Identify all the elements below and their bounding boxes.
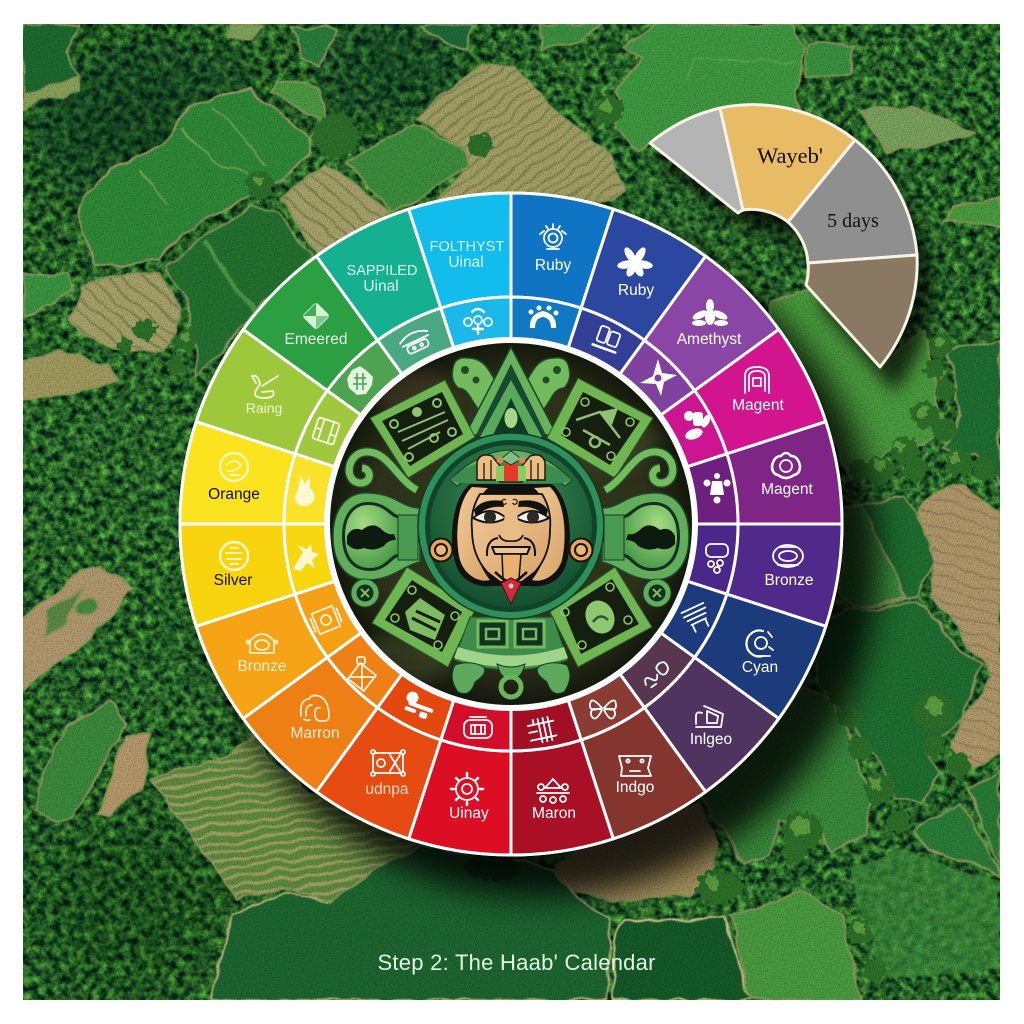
segment label: Maron: Maron (532, 805, 576, 822)
segment label: Amethyst: Amethyst (677, 331, 742, 348)
segment label: Cyan (742, 630, 778, 676)
segment label: Bronze 1: Bronze (764, 572, 814, 589)
brows (474, 500, 504, 517)
bottom ornament (452, 617, 570, 697)
nose and mouth (499, 507, 523, 541)
segment label: Ruby 2: Ruby (618, 282, 654, 299)
segment label: Amethyst (677, 299, 742, 348)
wedge backgrounds: 20 outer and 20 inner cells (165, 178, 857, 870)
segment label: Folthyst Uinal: Uinal (448, 254, 484, 271)
glyph (684, 411, 712, 442)
glyph (347, 366, 373, 395)
segment label: Sapphire Uinal (347, 263, 417, 295)
segment label: Bronze 1 (764, 545, 814, 589)
glyph (640, 359, 677, 396)
segment label: Inlgeo (690, 706, 732, 748)
top triangle (465, 347, 557, 437)
segment label: Emeered (285, 302, 347, 348)
fan segment: brown (806, 255, 917, 367)
segment label: Uinay: Uinay (449, 805, 489, 822)
segment label: Folthyst Uinal: FOLTHYST (430, 239, 504, 255)
segment label: Raing: Raing (246, 400, 282, 416)
glyph (464, 717, 492, 738)
segment label: Emeered: Emeered (285, 331, 347, 348)
fan segment: 5 days (788, 140, 917, 263)
segment label: Raing (246, 376, 282, 416)
segment label: Orange (208, 453, 260, 503)
glyph (590, 700, 616, 719)
segment label: Inlgeo: Inlgeo (690, 731, 732, 748)
segment label: Magent 2: Magent (761, 481, 814, 498)
ear rings (430, 538, 592, 562)
fan segment: Wayeb: Wayeb' (757, 143, 823, 168)
segment label: Indgo: Indgo (616, 779, 654, 796)
field group: top right fields (540, 24, 1000, 485)
segment label: Silver (214, 542, 252, 589)
segment label: Sapphire Uinal: SAPPILED (347, 263, 417, 279)
shadow under calendar wheel (203, 222, 879, 898)
glyph (401, 690, 437, 721)
glyph (593, 325, 622, 353)
glyph (527, 716, 557, 745)
segment label: Silver: Silver (214, 572, 252, 589)
glyph (295, 476, 314, 506)
segment label: Magent 2 (761, 453, 814, 498)
segment label: Marron (290, 695, 340, 742)
tree clusters (117, 96, 997, 982)
segment label: Maron (532, 779, 576, 822)
shadow under Wayeb fan (662, 127, 932, 392)
glyph (704, 473, 730, 504)
segment label: udnpa (365, 750, 409, 798)
tablet: top left (370, 380, 475, 478)
segment label: Folthyst Uinal (430, 239, 504, 271)
tablet: top right (547, 378, 653, 478)
tablet: bottom left (372, 567, 475, 667)
segment label: Cyan: Cyan (742, 659, 778, 676)
fan segment: Wayeb (720, 105, 855, 222)
glyph (309, 605, 343, 635)
segment label: Ruby 1 (535, 224, 571, 274)
glyph (293, 544, 319, 571)
segment label: Marron: Marron (290, 725, 340, 742)
segment label: Uinay (449, 773, 489, 822)
segment label: Ruby 2 (617, 246, 654, 299)
segment label: Bronze 2 (237, 634, 287, 675)
left ear scroll (333, 452, 420, 607)
mask face (452, 484, 570, 604)
top knots (452, 358, 570, 412)
eyes (473, 511, 506, 522)
glyph (348, 657, 376, 691)
glyph (640, 660, 672, 689)
central ring (418, 433, 604, 619)
inner ring glyphs (293, 306, 730, 745)
segment label: Indgo (616, 756, 654, 796)
glyph (398, 327, 433, 356)
white wheel edge (178, 192, 844, 856)
forest shading (30, 20, 470, 990)
fan segment: 5 days: 5 days (827, 210, 879, 232)
field group: right side fields (702, 486, 1000, 864)
panel: Wayeb fan (650, 105, 917, 367)
segment label: Magent 1: Magent (732, 397, 785, 414)
glyph (681, 603, 713, 634)
dial background disc (327, 340, 695, 708)
glyph (528, 306, 558, 328)
headdress (450, 450, 572, 486)
panel: calendar wheel of 20 uinal (165, 178, 857, 870)
segment label: Ruby 1: Ruby (535, 257, 571, 274)
field lines (140, 105, 265, 205)
tablet: bottom right (550, 567, 652, 667)
white dial border (327, 340, 695, 708)
title: Step 2: The Haab' Calendar (378, 950, 656, 975)
field group: top left fields (23, 24, 624, 400)
fan segment: light grey (650, 108, 743, 213)
glyph (706, 544, 728, 573)
right ear scroll (602, 452, 689, 607)
glyph (464, 309, 492, 334)
segment label: Sapphire Uinal: Uinal (363, 278, 399, 295)
segment label: Orange: Orange (208, 486, 260, 503)
field group: bottom fields (23, 565, 1000, 1000)
glyph (312, 417, 340, 445)
segment label: udnpa: udnpa (365, 781, 409, 798)
segment label: Magent 1 (732, 367, 785, 414)
segment label: Bronze 2: Bronze (237, 658, 287, 675)
forehead mark (502, 499, 517, 504)
central dial: Maya mask (327, 340, 695, 708)
